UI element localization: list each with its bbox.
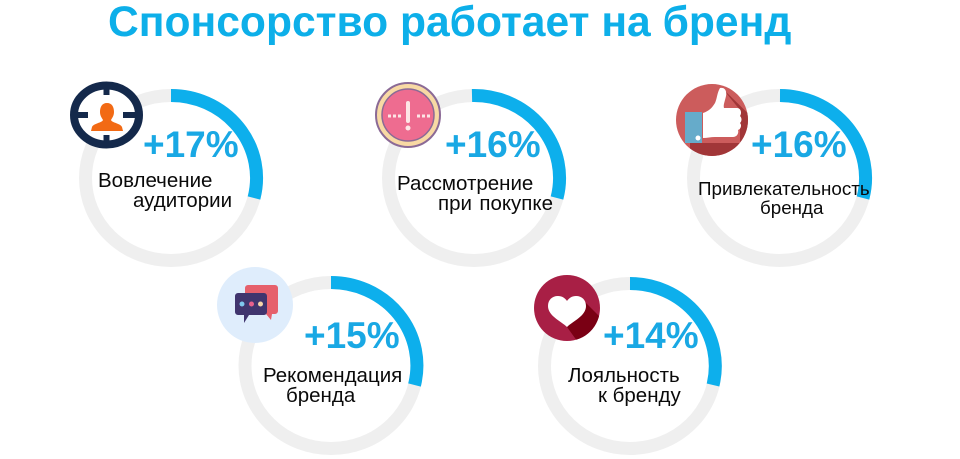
value: +16% <box>751 124 847 165</box>
ring progress arc <box>630 284 715 385</box>
value: +17% <box>143 124 239 165</box>
ring progress arc <box>331 282 417 385</box>
panel: brand loyalty <box>534 275 716 448</box>
value: +15% <box>304 315 400 356</box>
label: Лояльность <box>568 364 680 387</box>
label: аудитории <box>133 189 232 212</box>
panel: purchase consideration <box>376 83 560 260</box>
panel: audience engagement <box>72 82 257 260</box>
ring track <box>86 96 256 260</box>
label: бренда <box>286 384 356 407</box>
ring track <box>694 96 866 260</box>
label: при покупке <box>438 192 553 215</box>
label: Рекомендация <box>263 364 402 387</box>
panel: brand attractiveness <box>676 84 870 260</box>
icon: exclamation dial <box>376 83 440 147</box>
ring progress arc <box>780 96 866 198</box>
ring track <box>388 96 560 260</box>
label: Привлекательность <box>698 178 870 199</box>
icon: thumbs up <box>676 84 748 156</box>
panel: brand recommendation <box>217 267 417 448</box>
value: +14% <box>603 315 699 356</box>
ring track <box>544 284 716 448</box>
label: к бренду <box>598 384 681 407</box>
ring progress arc <box>472 95 560 198</box>
label: Вовлечение <box>98 169 212 192</box>
label: бренда <box>760 197 824 218</box>
icon: heart <box>534 275 600 341</box>
ring progress arc <box>171 95 257 198</box>
value: +16% <box>445 124 541 165</box>
icon: chat bubbles <box>217 267 293 343</box>
ring track <box>245 282 417 448</box>
label: Рассмотрение <box>397 172 533 195</box>
icon: target with person <box>72 82 140 148</box>
